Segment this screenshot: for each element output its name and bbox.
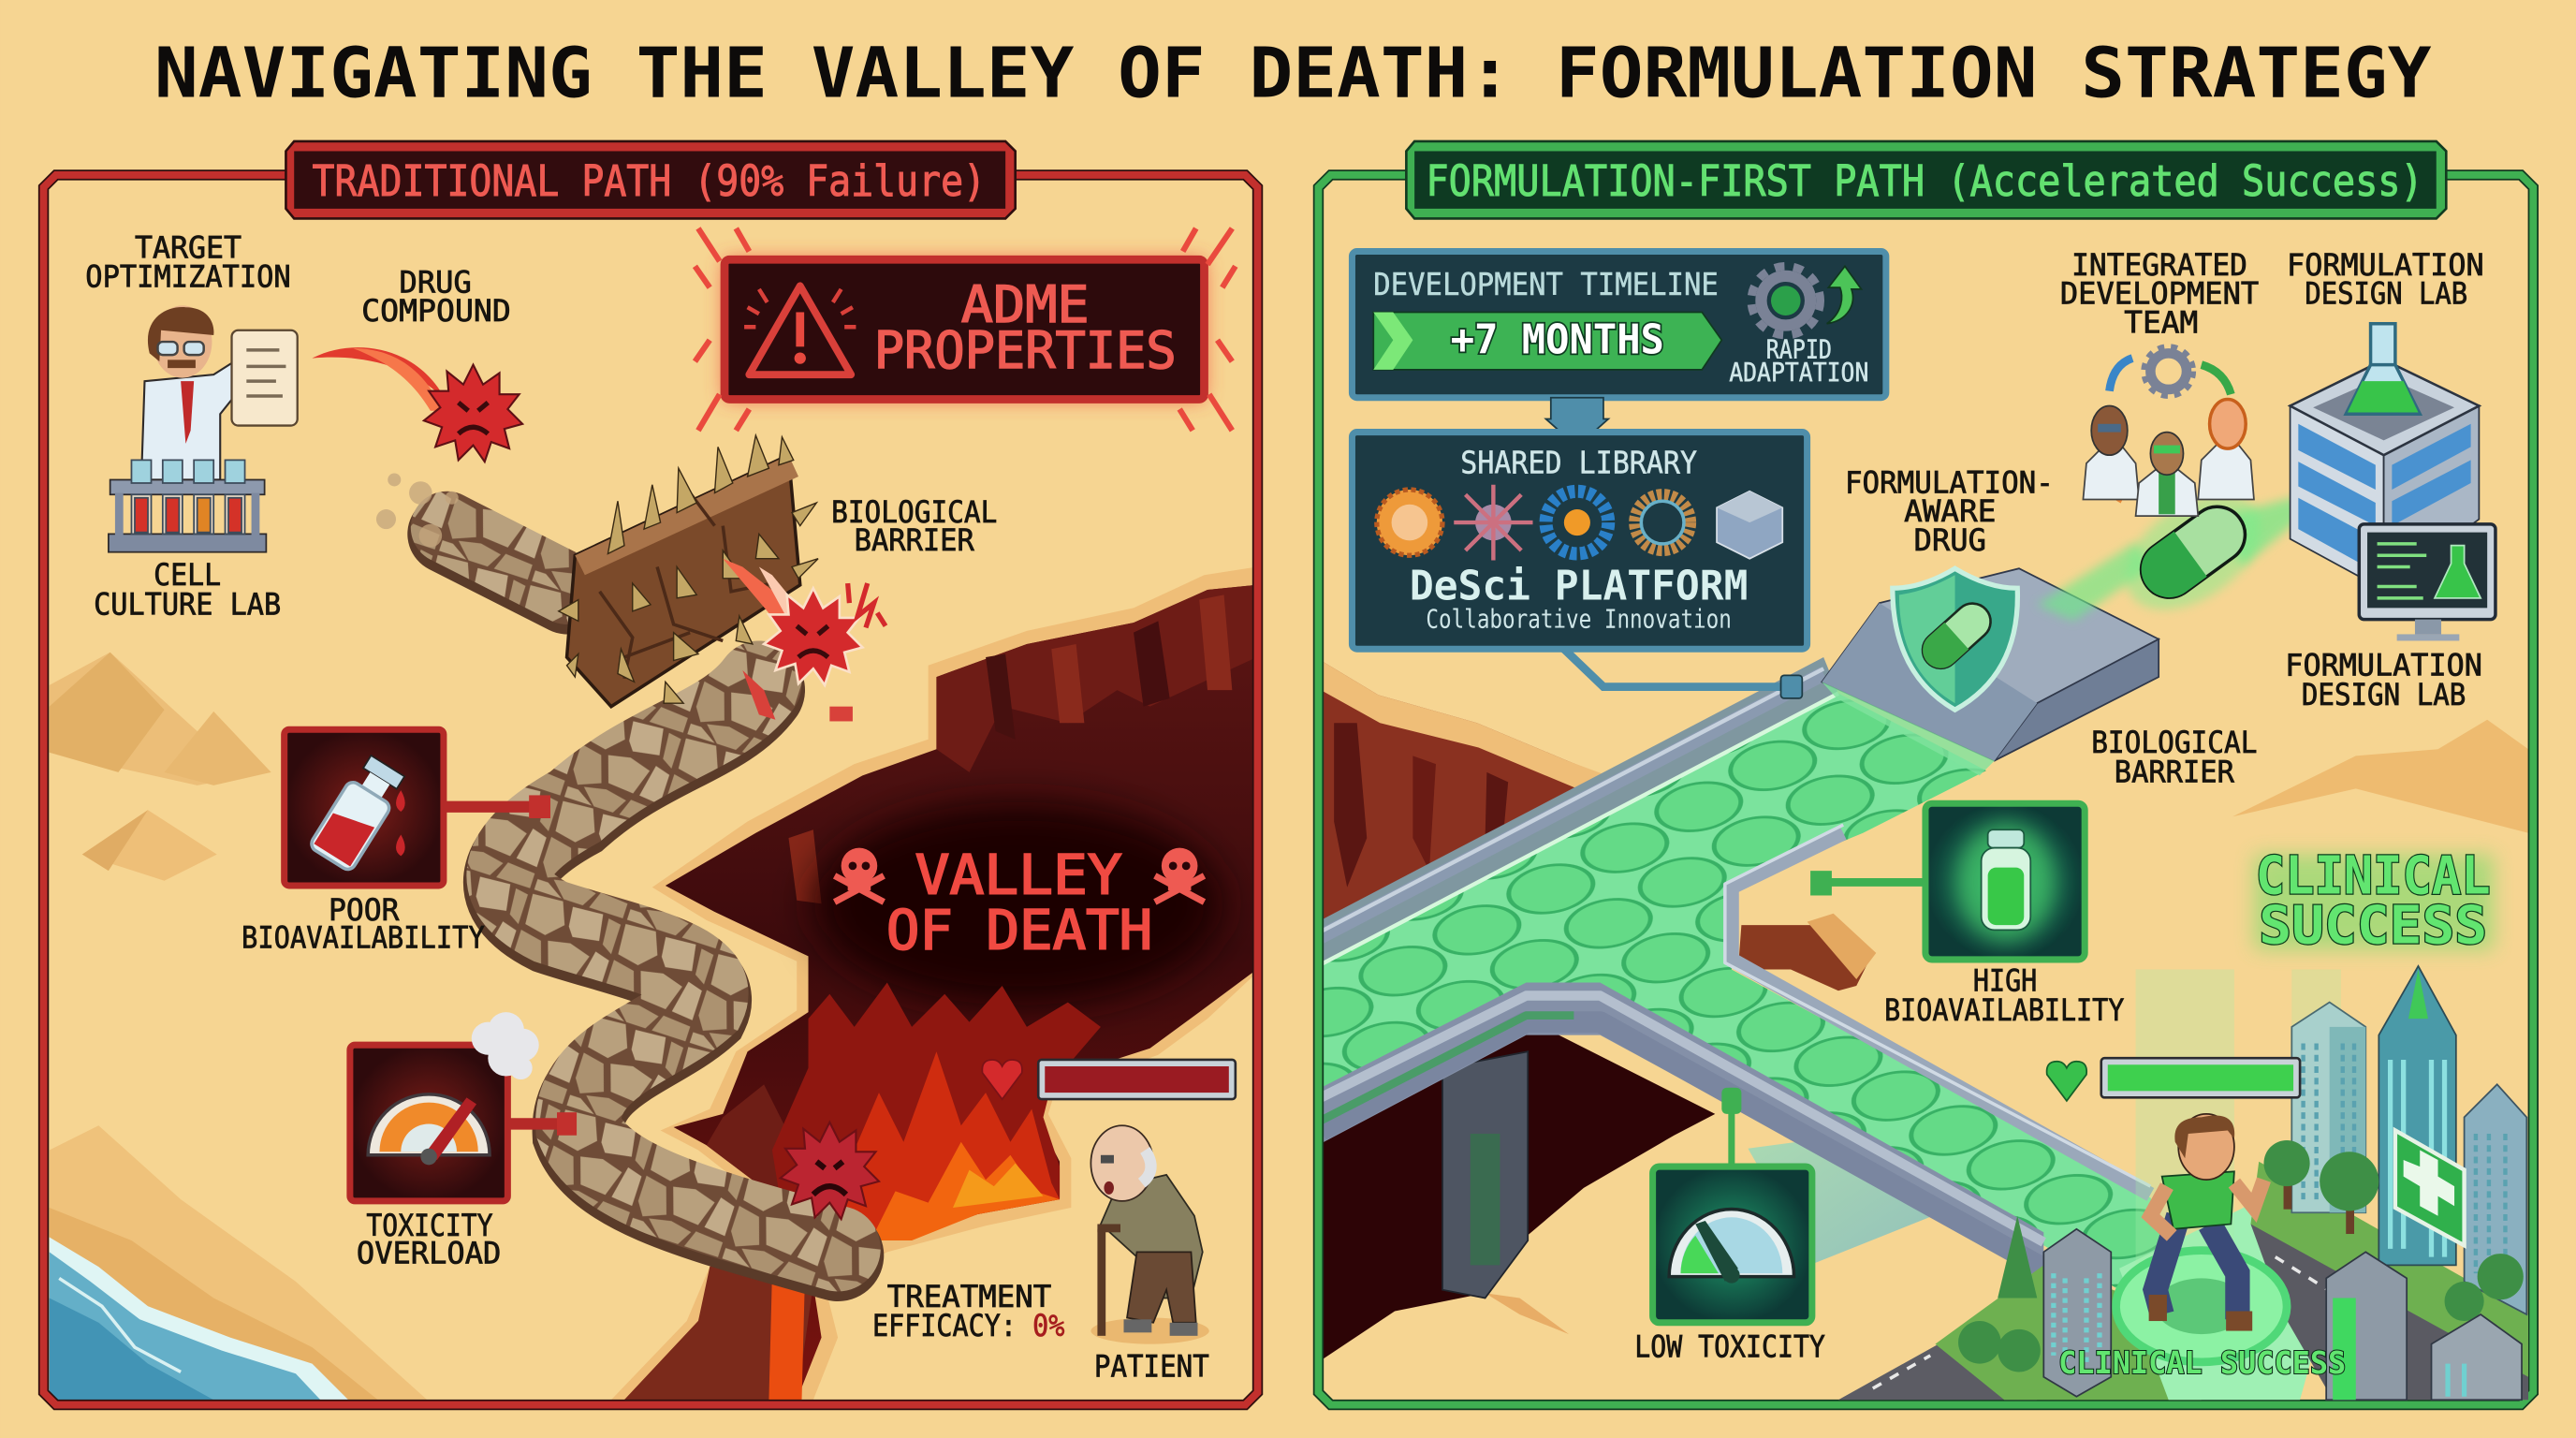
- icon: gear: [1751, 266, 1821, 335]
- icon: up arrow: [1827, 266, 1862, 324]
- label: treatment efficacy: EFFICACY: 0%: [872, 1308, 1065, 1343]
- label: formulation design lab top: [2287, 247, 2484, 312]
- heading: clinical success: CLINICAL: [2256, 846, 2491, 907]
- header: formulation-first path: FORMULATION-FIRST PATH (Accelerated Success): [1426, 156, 2423, 206]
- connector: library to deck: [1564, 649, 1802, 698]
- label: cell culture lab: CULTURE LAB: [94, 586, 281, 622]
- label: biological barrier: BARRIER: [855, 522, 974, 558]
- lower chasm under bridge: [1321, 1027, 1715, 1360]
- label: drug compound: DRUG: [400, 264, 472, 300]
- hex bridge deck: [1321, 694, 2185, 1290]
- frame: traditional: [44, 175, 1258, 1405]
- under-bridge light: [1748, 1136, 1945, 1264]
- connector: timeline to library: [1546, 398, 1608, 433]
- label: high bioavailability: BIOAVAILABILITY: [1884, 992, 2124, 1028]
- label: integrated development team: INTEGRATED: [2071, 247, 2247, 283]
- label: biological barrier right: [2091, 725, 2257, 789]
- icon: low-rise buildings: [2043, 1229, 2522, 1400]
- icon: scientist: [141, 305, 298, 479]
- label: poor bioavailability: BIOAVAILABILITY: [242, 920, 485, 956]
- icon: monitor: [2359, 524, 2496, 640]
- timeline arrow: +7 MONTHS: [1451, 315, 1664, 363]
- panel: development timeline: RAPID: [1766, 336, 1832, 365]
- health bar: empty: [1038, 1060, 1236, 1099]
- panel: development timeline: ADAPTATION: [1729, 359, 1868, 388]
- label: biological barrier: BIOLOGICAL: [831, 494, 997, 530]
- icon: bright bottle: [1982, 829, 2030, 930]
- label: formulation design lab lower: DESIGN LAB: [2302, 677, 2466, 712]
- label: biological barrier right: BIOLOGICAL: [2091, 725, 2257, 760]
- icon: skull right: [1155, 848, 1204, 902]
- capsule trail: [2037, 485, 2341, 621]
- label: formulation design lab top: FORMULATION: [2287, 247, 2484, 283]
- callout: ADME properties: [695, 228, 1236, 431]
- icon box: high bioavailability: [1810, 803, 2085, 960]
- icon: bottle: [309, 753, 409, 873]
- label: clinical success small: CLINICAL SUCCESS: [2058, 1344, 2346, 1381]
- label: formulation-aware drug: DRUG: [1914, 522, 1986, 558]
- icon: compound falling in lava: [781, 1123, 879, 1219]
- timeline arrow: [1373, 312, 1721, 370]
- label: target optimization: TARGET: [135, 230, 242, 266]
- icon: smoke: [472, 1012, 539, 1079]
- header: formulation-first path: [1406, 141, 2446, 218]
- icon box: toxicity overload: [350, 1012, 577, 1201]
- pillar: [1442, 1051, 1528, 1298]
- label: integrated development team: DEVELOPMENT: [2060, 276, 2259, 312]
- label: target optimization: [85, 230, 291, 294]
- icon box: low toxicity: [1653, 1088, 1812, 1323]
- label: high bioavailability: HIGH: [1973, 962, 2037, 998]
- icon: barrier block: [1822, 568, 2159, 775]
- icon: skyscrapers: [2291, 966, 2526, 1314]
- upper chasm rock: [1321, 661, 1660, 969]
- icon: hospital sign: [2395, 1130, 2465, 1245]
- icon: formulation lab building: [2291, 324, 2479, 590]
- label: cell culture lab: [94, 557, 281, 622]
- label: treatment efficacy: [872, 1279, 1065, 1343]
- sand bands near shore: [50, 1125, 427, 1400]
- panel: DeSci shared library: DeSci PLATFORM: [1410, 563, 1748, 610]
- panel: formulation-first path: [1318, 141, 2533, 1405]
- icon row: nanocarriers: [1377, 485, 1782, 560]
- label: biological barrier: [831, 494, 997, 558]
- label: formulation design lab lower: FORMULATION: [2285, 647, 2482, 682]
- label: treatment efficacy: TREATMENT: [887, 1279, 1051, 1314]
- icon: runner: [2149, 1114, 2263, 1331]
- icon: team: [2083, 346, 2254, 516]
- label: toxicity overload: [357, 1208, 501, 1271]
- panel: development timeline: [1352, 252, 1886, 398]
- icon: compound hitting barrier: [723, 559, 886, 721]
- label: drug compound: [361, 264, 511, 329]
- panel: traditional path: [44, 141, 1258, 1405]
- icon: heart red: [982, 1060, 1022, 1099]
- label: poor bioavailability: POOR: [329, 892, 400, 928]
- sea: [50, 1238, 348, 1400]
- label: formulation-aware drug: [1845, 465, 2054, 558]
- label: formulation-aware drug: FORMULATION-: [1845, 465, 2054, 501]
- icon: trees: [1958, 1140, 2524, 1372]
- label: high bioavailability: [1884, 962, 2124, 1028]
- heading: clinical success: [2254, 846, 2494, 956]
- icon: drug compound falling: [313, 347, 522, 462]
- icon: spiked biological barrier: [559, 435, 818, 707]
- stone path: [446, 527, 838, 1255]
- icon: flying capsule: [2105, 471, 2281, 633]
- bridge rails: [1321, 657, 2150, 1275]
- panel: DeSci shared library: Collaborative Innovation: [1426, 605, 1732, 634]
- label: formulation design lab lower: [2285, 647, 2482, 712]
- dunes: [50, 653, 271, 881]
- small chasm at bridge turn: [1738, 925, 1871, 990]
- panel: development timeline: DEVELOPMENT TIMELINE: [1373, 266, 1719, 302]
- valley of death chasm: [611, 566, 1257, 1400]
- label: drug compound: COMPOUND: [361, 293, 511, 329]
- label: biological barrier right: BARRIER: [2115, 754, 2234, 789]
- icon: test tube rack: [109, 460, 266, 552]
- icon: shield with capsule: [1893, 568, 2017, 710]
- dune right: [2232, 720, 2528, 833]
- icon: heart green: [2047, 1062, 2086, 1101]
- title: NAVIGATING THE VALLEY OF DEATH: FORMULATION STRATEGY: [154, 35, 2432, 114]
- callout: ADME properties: PROPERTIES: [874, 321, 1177, 380]
- heading: clinical success: SUCCESS: [2259, 895, 2487, 956]
- label: patient: PATIENT: [1094, 1349, 1209, 1385]
- icon box: poor bioavailability: [285, 729, 550, 886]
- label: integrated development team: TEAM: [2124, 304, 2198, 340]
- label: target optimization: OPTIMIZATION: [85, 258, 291, 294]
- heading: valley of death: OF DEATH: [886, 899, 1152, 962]
- label: toxicity overload: OVERLOAD: [357, 1236, 501, 1271]
- icon: overheated gauge: [368, 1094, 490, 1165]
- label: cell culture lab: CELL: [154, 557, 221, 593]
- heading: valley of death: VALLEY: [915, 844, 1122, 907]
- label: formulation-aware drug: AWARE: [1904, 493, 1996, 529]
- label: formulation design lab top: DESIGN LAB: [2305, 276, 2467, 312]
- header: traditional path: [285, 141, 1016, 218]
- panel: DeSci shared library: [1352, 433, 1808, 649]
- label: low toxicity: LOW TOXICITY: [1634, 1329, 1825, 1365]
- callout: ADME properties: ADME: [961, 275, 1090, 334]
- dust puffs: [376, 473, 459, 547]
- icon: patient: [1090, 1125, 1209, 1344]
- header: traditional path: TRADITIONAL PATH (90% Failure): [313, 156, 986, 206]
- icon: flask on roof: [2346, 324, 2420, 414]
- label: integrated development team: [2060, 247, 2259, 340]
- city ground and roads: [1838, 969, 2528, 1400]
- icon: healthy gauge: [1669, 1210, 1794, 1284]
- icon: skull left: [835, 848, 884, 902]
- icon: warning triangle: [744, 286, 856, 374]
- panel: DeSci shared library: SHARED LIBRARY: [1460, 444, 1697, 480]
- label: poor bioavailability: [242, 892, 485, 956]
- frame: formulation: [1318, 175, 2533, 1405]
- health bar: full: [2101, 1058, 2300, 1097]
- heading: valley of death: [835, 844, 1204, 962]
- label: toxicity overload: TOXICITY: [366, 1208, 493, 1243]
